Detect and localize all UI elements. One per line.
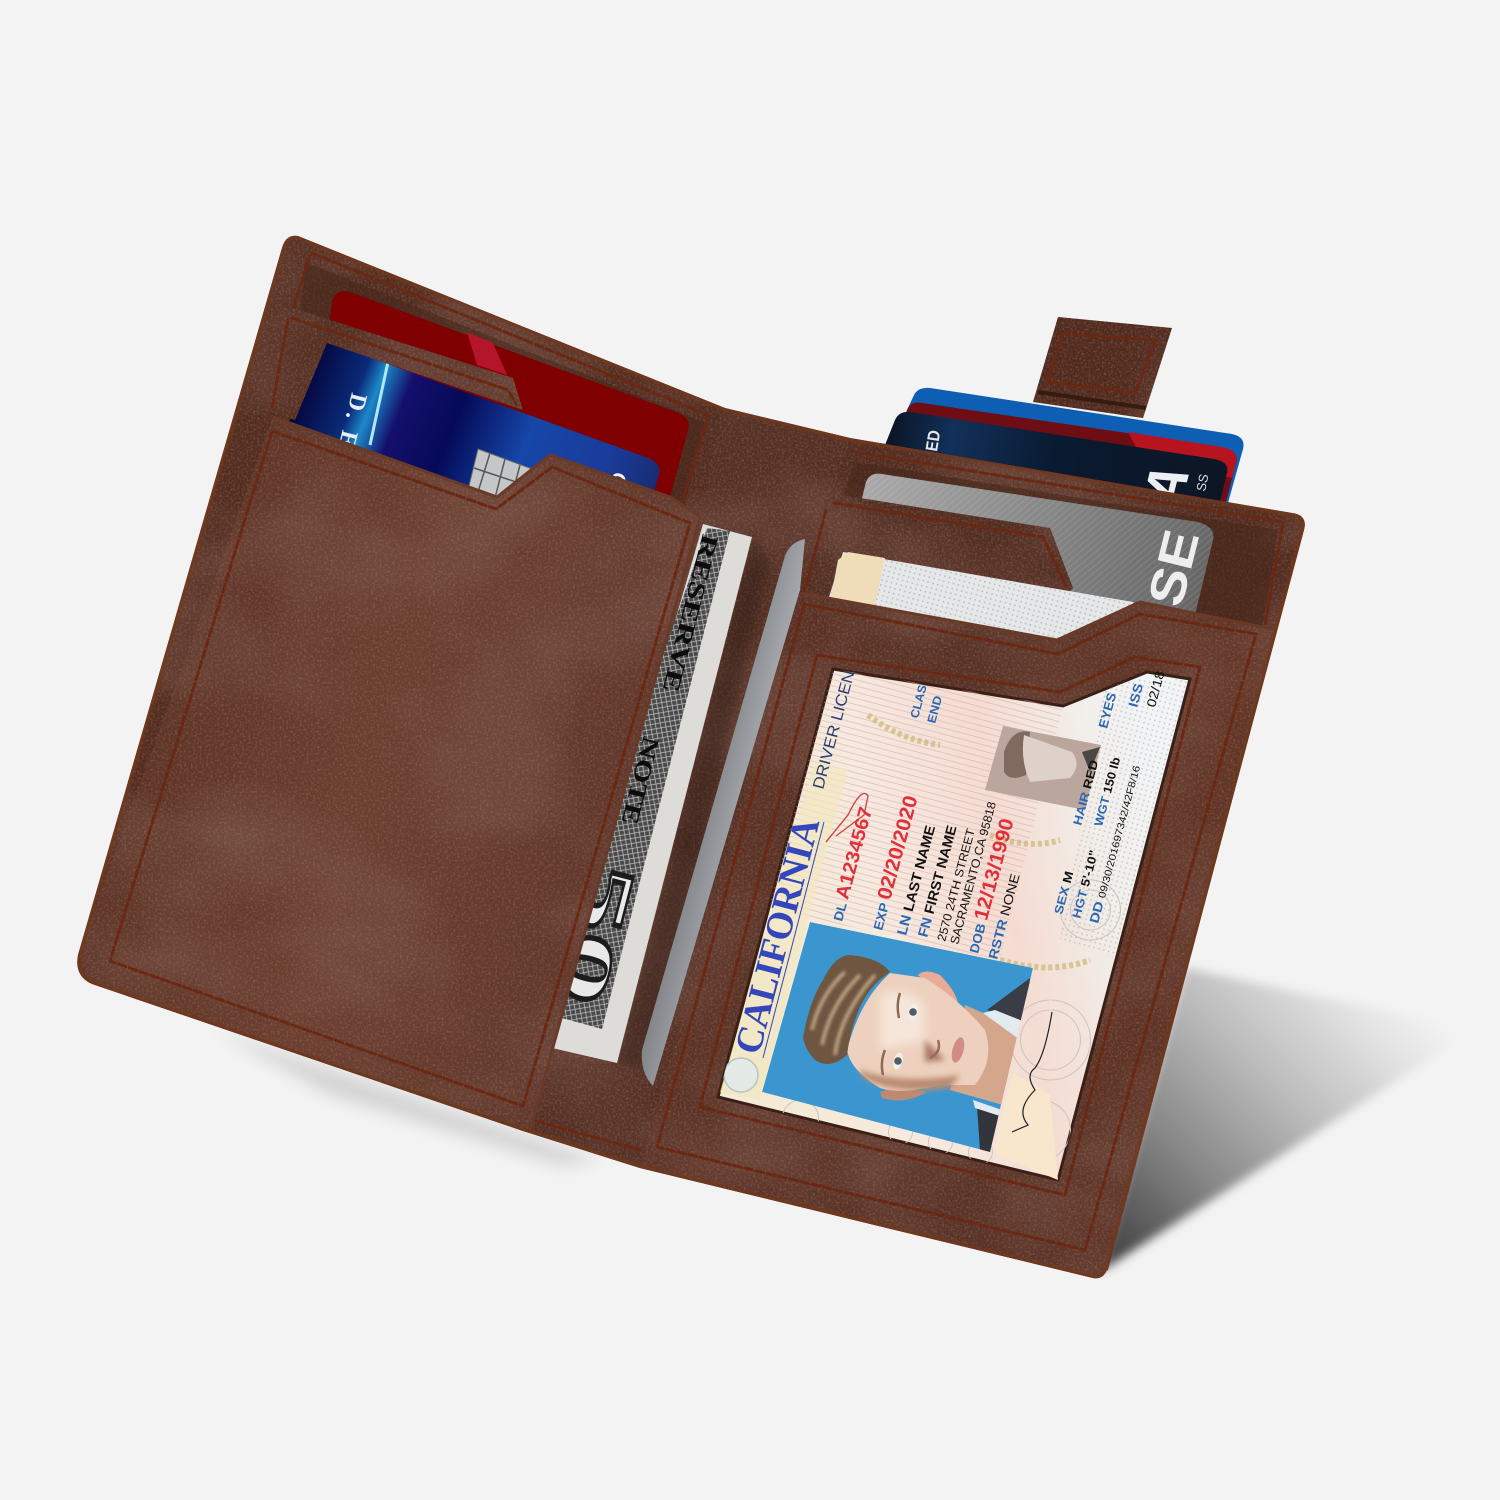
- license fields: DL A1234567: [827, 805, 877, 923]
- hair: [803, 955, 890, 1064]
- license fields: FN FIRST NAME: [914, 824, 960, 939]
- eyes: [908, 1004, 918, 1020]
- license fields: WGT 150 lb: [1091, 756, 1123, 828]
- seal: [724, 1058, 758, 1092]
- cream strip: [830, 552, 885, 612]
- back cards: blue, red and navy: [880, 388, 1244, 515]
- card text: SS: SS: [1193, 472, 1212, 493]
- card text: O: O: [606, 470, 632, 492]
- banknote print: [540, 528, 730, 1029]
- second pocket, right: [804, 496, 1073, 594]
- card: blue: [895, 388, 1244, 510]
- blue card, left: [288, 343, 660, 510]
- gold seal marks: [868, 715, 1090, 968]
- signature patch: [993, 1073, 1058, 1180]
- card streak: [370, 362, 388, 445]
- card: red highlight: [1128, 432, 1237, 478]
- driver license: [718, 669, 1190, 1180]
- wallet edge rim: [77, 236, 1305, 1278]
- banknote: [540, 524, 770, 1070]
- banknote numeral: 50: 50: [543, 853, 650, 1013]
- card: navy: [880, 412, 1227, 510]
- card text: A: A: [1130, 458, 1201, 515]
- wallet body: [60, 220, 1320, 1290]
- license fields: EYES: [1095, 691, 1119, 730]
- license fields: 2570 24TH STREET: [934, 826, 978, 943]
- stitches: upper rim: [312, 253, 708, 510]
- license fields: END: [924, 694, 945, 725]
- banknote text: NOTE: NOTE: [616, 733, 663, 827]
- ears: [918, 972, 958, 1003]
- front pocket, right: [640, 592, 1274, 1278]
- red map outline: [826, 793, 868, 842]
- license fields: SACRAMENTO,CA 95818: [947, 800, 999, 946]
- dot pattern: [1060, 679, 1190, 960]
- cast shadow: right: [1100, 968, 1475, 1272]
- license fields: [827, 669, 1167, 961]
- face highlight and shadow: [880, 992, 925, 1050]
- title rule: [763, 822, 824, 1058]
- ghost portrait: [985, 726, 1101, 810]
- contour lines: [782, 880, 1121, 1164]
- portrait photo: [762, 922, 1033, 1153]
- neck: [950, 1005, 1020, 1107]
- cast shadow: left: [215, 1030, 600, 1165]
- cream band: [720, 760, 848, 1100]
- upper-left interior: [290, 262, 704, 505]
- lips: [952, 1037, 964, 1063]
- state title: CALIFORNIA: [727, 813, 828, 1058]
- signature: [1012, 1012, 1052, 1132]
- brows: [898, 993, 900, 1018]
- chip: [468, 449, 535, 510]
- license fields: DOB 12/13/1990: [962, 816, 1019, 955]
- pull tab: [1033, 317, 1172, 418]
- gray card, right: [850, 474, 1213, 615]
- banknote text: RESERVE: RESERVE: [657, 531, 722, 695]
- spine interior: [520, 430, 850, 1168]
- spine stitches: [525, 1118, 640, 1150]
- right interior: [805, 462, 1278, 630]
- license fields: SEX M: [1051, 870, 1076, 916]
- license fields: HGT 5'-10": [1069, 849, 1101, 920]
- license fields: ISS: [1125, 681, 1146, 709]
- face: [847, 973, 988, 1091]
- front pocket, left: [78, 416, 702, 1130]
- red card, left: [320, 291, 689, 505]
- card: red: [890, 403, 1237, 510]
- nose: [930, 1040, 939, 1058]
- license fields: LN LAST NAME: [893, 823, 938, 937]
- license fields: CLAS: [907, 683, 930, 720]
- license fields: DD 09/30/201697342/42F8/16: [1086, 763, 1143, 925]
- license fields: 02/18: [1143, 669, 1167, 709]
- collar: [983, 1010, 1021, 1040]
- card stripe: [467, 332, 507, 375]
- jacket: [987, 978, 1030, 1022]
- second pocket, left: [270, 308, 523, 420]
- security pattern: [760, 669, 1063, 960]
- license fields: HAIR RED: [1070, 758, 1101, 827]
- license fields: RSTR NONE: [985, 872, 1023, 961]
- banknote shadow: [617, 537, 770, 1070]
- license fields: EXP 02/20/2020: [866, 793, 923, 932]
- silver card strip: [642, 539, 805, 1086]
- card text: SE: SE: [1137, 524, 1210, 612]
- license back peek: [825, 552, 1140, 645]
- card text: D. E: D. E: [332, 391, 371, 452]
- license header: DRIVER LICEN: [810, 669, 858, 791]
- card text: ED: ED: [922, 429, 944, 453]
